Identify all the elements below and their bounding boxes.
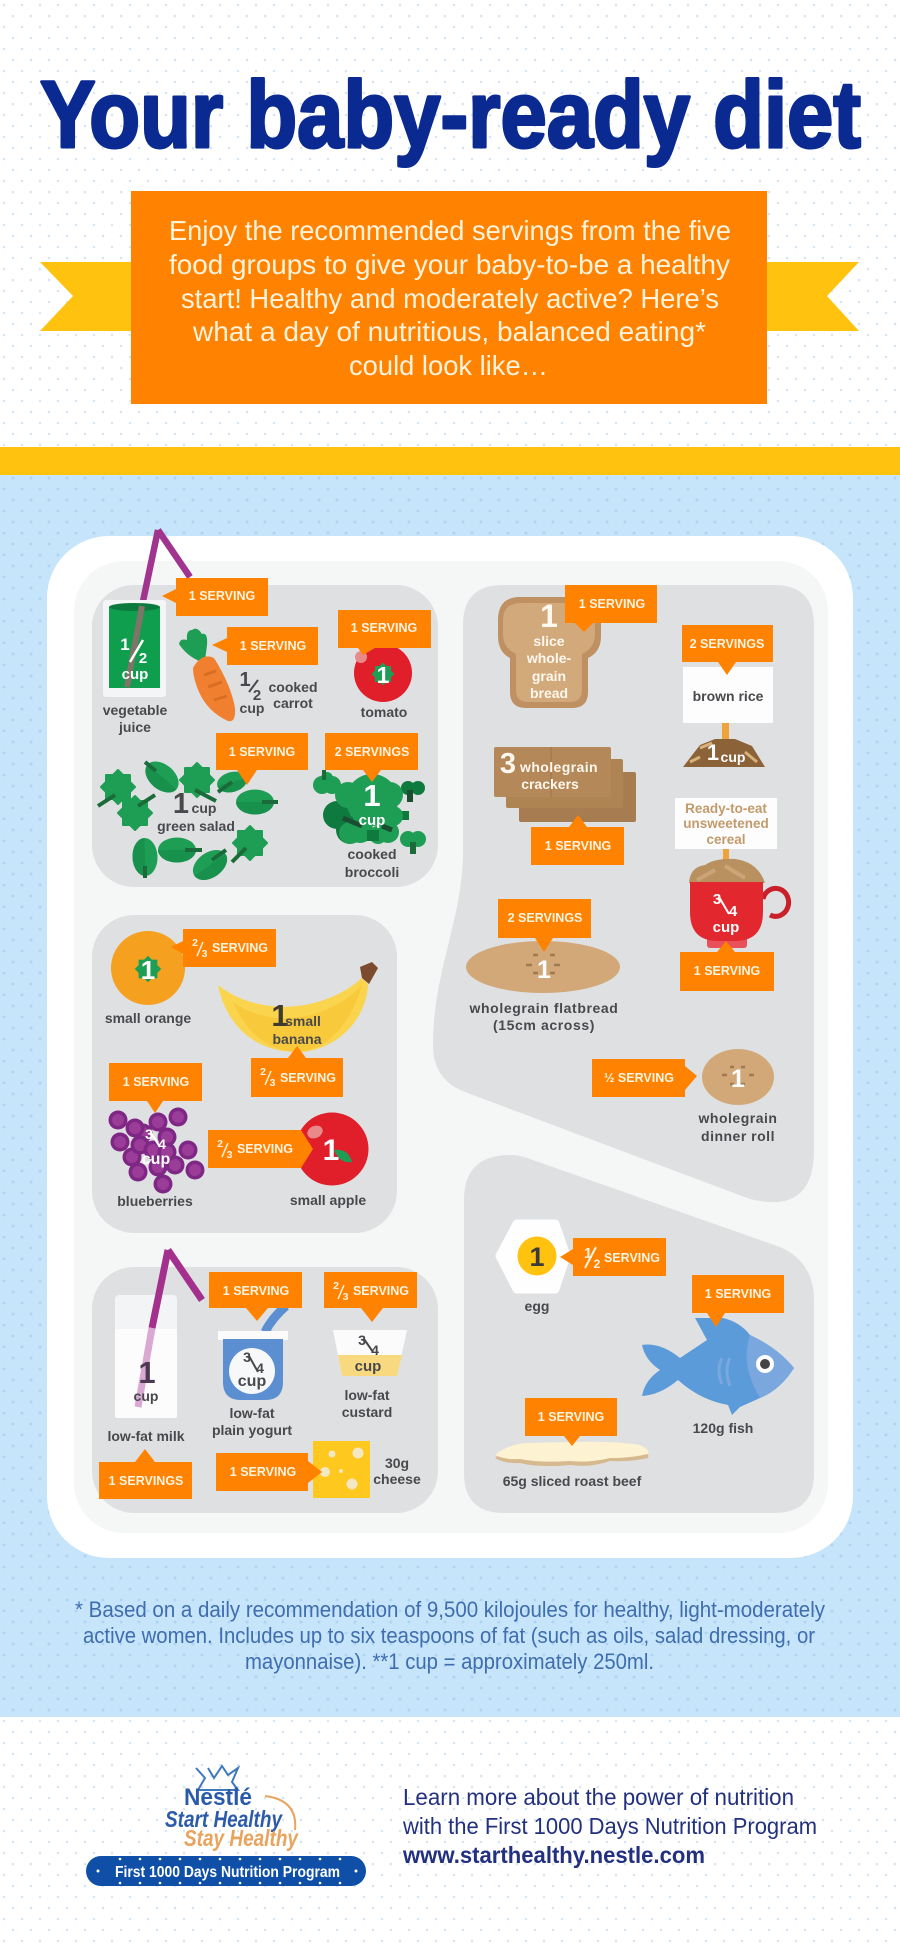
tomato: tomato — [361, 704, 407, 720]
tag: cereal serving — [680, 941, 774, 991]
120g fish: 120g fish — [693, 1420, 753, 1436]
brown rice — [683, 667, 773, 767]
logo: Nestlé Start Healthy Stay Healthy — [86, 1766, 366, 1886]
tag: cereal serving: 1 SERVING — [694, 964, 760, 978]
footer call to action: Learn more about the power of nutrition — [403, 1784, 794, 1810]
low-fat custard: cup — [355, 1358, 381, 1375]
tag: blueberries serving — [109, 1063, 202, 1113]
low-fat plain yogurt: 3 — [243, 1349, 251, 1365]
ready-to-eat cereal: 4 — [729, 903, 738, 920]
tag: blueberries serving: 1 SERVING — [123, 1075, 189, 1089]
banana — [218, 962, 378, 1052]
tag: yogurt serving — [209, 1272, 302, 1321]
tag: flatbread serving — [498, 899, 591, 952]
tag: carrot serving: 1 SERVING — [240, 639, 306, 653]
egg — [500, 1224, 566, 1314]
tag: salad serving: 1 SERVING — [229, 745, 295, 759]
vegetable juice: 1 — [120, 635, 130, 654]
panel: blue section background — [0, 475, 900, 1717]
tag: custard serving: SERVING — [353, 1284, 409, 1298]
blueberries: 3 — [145, 1126, 153, 1142]
wholegrain dinner roll: 1 — [731, 1065, 745, 1093]
brown rice: cup — [721, 749, 745, 765]
cooked carrot: 2 — [253, 687, 261, 704]
footer call to action: with the First 1000 Days Nutrition Program — [402, 1813, 817, 1839]
logo: Nestlé Start Healthy Stay Healthy: Start Healthy — [165, 1806, 283, 1832]
tag: cheese serving: 1 SERVING — [230, 1465, 296, 1479]
green salad: 1 — [173, 788, 189, 820]
footnote — [75, 1597, 826, 1674]
wholegrain crackers: wholegrain — [519, 759, 598, 775]
cooked broccoli: 1 — [363, 778, 381, 813]
brown rice: 1 — [707, 740, 719, 765]
ready-to-eat cereal: cup — [713, 919, 739, 936]
arc — [265, 1796, 295, 1830]
wholegrain dinner roll: dinner roll — [701, 1128, 775, 1144]
vegetable juice: vegetable — [103, 702, 168, 718]
tag: egg serving: 2 — [594, 1257, 601, 1271]
brown rice: brown rice — [693, 688, 764, 704]
wholegrain crackers — [494, 747, 636, 822]
low-fat plain yogurt: plain yogurt — [212, 1422, 292, 1438]
30g cheese: cheese — [373, 1471, 421, 1487]
low-fat custard: custard — [342, 1404, 392, 1420]
banana: 1 — [271, 998, 289, 1033]
wholegrain bread: 1 — [540, 598, 558, 634]
tag: banana serving: 2 — [260, 1066, 266, 1078]
cooked broccoli: broccoli — [345, 864, 399, 880]
tag: juice serving — [162, 578, 268, 616]
vegetable juice — [103, 530, 190, 735]
low-fat plain yogurt: low-fat — [229, 1405, 275, 1421]
tag: fish serving: 1 SERVING — [705, 1287, 771, 1301]
tag: banana serving: SERVING — [280, 1071, 336, 1085]
panel: grains compartment — [433, 585, 814, 1202]
small orange: small orange — [105, 1010, 191, 1026]
tag: beef serving — [525, 1398, 617, 1446]
green salad: cup — [192, 800, 216, 816]
small apple — [290, 1112, 368, 1208]
low-fat custard: 3 — [358, 1332, 366, 1348]
low-fat custard: low-fat — [344, 1387, 390, 1403]
tag: custard serving — [324, 1272, 417, 1322]
ribbon left tail — [40, 262, 135, 331]
small orange: 1 — [141, 955, 155, 985]
cooked broccoli: cup — [359, 812, 385, 829]
tag: banana serving: 3 — [270, 1077, 276, 1089]
ready-to-eat cereal — [675, 798, 789, 948]
egg: 1 — [529, 1242, 545, 1272]
orange intro box — [131, 191, 767, 404]
small orange — [105, 931, 191, 1026]
tag: crackers serving: 1 SERVING — [545, 839, 611, 853]
wholegrain crackers: 3 — [500, 748, 516, 780]
tag: tomato serving — [338, 610, 431, 655]
cooked carrot: carrot — [273, 695, 313, 711]
tag: broccoli serving: 2 SERVINGS — [335, 745, 409, 759]
ready-to-eat cereal: 3 — [713, 891, 721, 908]
green salad — [98, 755, 278, 886]
low-fat plain yogurt: 4 — [256, 1360, 264, 1376]
blueberries: cup — [142, 1151, 170, 1168]
120g fish — [642, 1318, 794, 1436]
wholegrain bread: slice — [533, 633, 565, 649]
low-fat milk: 1 — [138, 1355, 156, 1390]
low-fat plain yogurt: cup — [238, 1373, 266, 1390]
tag: bread serving: 1 SERVING — [579, 597, 645, 611]
low-fat custard: 4 — [371, 1342, 379, 1358]
cooked broccoli — [313, 770, 426, 880]
tag: egg serving — [560, 1238, 666, 1276]
tag: egg serving: 1 — [584, 1245, 592, 1262]
wholegrain crackers: crackers — [521, 776, 579, 792]
intro text: could look like… — [349, 350, 548, 381]
intro text: what a day of nutritious, balanced eating* — [192, 316, 706, 347]
cooked carrot: cup — [240, 700, 264, 716]
wholegrain bread: bread — [530, 685, 568, 701]
intro text — [169, 215, 731, 381]
footnote: * Based on a daily recommendation of 9,500 kilojoules for healthy, light-moderately — [75, 1597, 826, 1622]
tomato — [354, 644, 412, 720]
logo: Nestlé Start Healthy Stay Healthy: Stay Healthy — [184, 1825, 299, 1851]
tag: carrot serving — [212, 627, 318, 665]
yellow divider band — [0, 447, 900, 475]
tag: roll serving — [592, 1059, 697, 1097]
cooked carrot — [179, 629, 318, 721]
wholegrain flatbread: (15cm across) — [493, 1017, 595, 1033]
wholegrain bread — [498, 597, 601, 708]
footer call to action — [402, 1784, 817, 1868]
low-fat milk: cup — [134, 1388, 158, 1404]
cooked carrot: 1 — [239, 669, 251, 691]
small apple: small apple — [290, 1192, 366, 1208]
65g sliced roast beef — [495, 1442, 648, 1489]
panel: protein compartment — [464, 1155, 814, 1513]
panel: lunch tray — [47, 536, 853, 1558]
low-fat custard — [333, 1330, 407, 1420]
intro text: food groups to give your baby-to-be a healthy — [169, 249, 730, 280]
tag: cheese serving — [216, 1453, 322, 1491]
ready-to-eat cereal: unsweetened — [683, 816, 769, 831]
tag: banana serving — [251, 1046, 343, 1097]
wholegrain flatbread: 1 — [537, 956, 551, 984]
wholegrain dinner roll: wholegrain — [698, 1110, 777, 1126]
panel: dairy compartment — [92, 1267, 438, 1513]
tag: apple serving: 2 — [217, 1138, 223, 1150]
tag: egg serving: SERVING — [604, 1251, 660, 1265]
logo: Nestlé Start Healthy Stay Healthy: First 1000 Days Nutrition Program — [115, 1864, 340, 1881]
cooked carrot: cooked — [268, 679, 318, 695]
tag: juice serving: 1 SERVING — [189, 589, 255, 603]
tag: crackers serving — [531, 815, 624, 865]
tag: orange serving — [171, 929, 276, 967]
green salad: green salad — [157, 818, 235, 834]
tag: beef serving: 1 SERVING — [538, 1410, 604, 1424]
blueberries: blueberries — [117, 1193, 193, 1209]
egg: egg — [525, 1298, 549, 1314]
wholegrain dinner roll — [698, 1049, 777, 1144]
blueberries: 4 — [158, 1136, 166, 1152]
tag: roll serving: ½ SERVING — [604, 1071, 674, 1085]
wholegrain flatbread — [466, 941, 620, 1033]
vegetable juice: cup — [122, 666, 148, 683]
tomato: 1 — [377, 662, 390, 688]
ready-to-eat cereal: cereal — [706, 832, 746, 847]
tag: orange serving: 3 — [202, 948, 208, 960]
icon: nest with birds — [196, 1766, 238, 1790]
tag: yogurt serving: 1 SERVING — [223, 1284, 289, 1298]
30g cheese — [313, 1441, 421, 1498]
wholegrain bread: whole- — [526, 650, 571, 666]
ribbon right tail — [765, 262, 859, 331]
tag: tomato serving: 1 SERVING — [351, 621, 417, 635]
tag: rice serving: 2 SERVINGS — [690, 637, 764, 651]
tag: broccoli serving — [325, 733, 418, 782]
low-fat milk: low-fat milk — [107, 1428, 185, 1444]
tag: milk serving — [99, 1449, 192, 1499]
banana: small — [285, 1013, 321, 1029]
vegetable juice: juice — [118, 719, 151, 735]
tag: custard serving: 2 — [333, 1280, 339, 1292]
tag: milk serving: 1 SERVINGS — [109, 1474, 183, 1488]
wholegrain bread: grain — [532, 668, 566, 684]
ready-to-eat cereal: Ready-to-eat — [685, 801, 767, 816]
banana: banana — [272, 1031, 322, 1047]
cooked broccoli: cooked — [347, 846, 397, 862]
panel: fruit compartment — [92, 915, 397, 1233]
tag: apple serving: 3 — [227, 1149, 233, 1161]
vegetable juice: 2 — [139, 650, 147, 667]
tag: rice serving — [682, 625, 773, 675]
tag: bread serving — [565, 585, 657, 632]
tag: orange serving: 2 — [192, 937, 198, 949]
low-fat plain yogurt — [212, 1306, 292, 1438]
tag: orange serving: SERVING — [212, 941, 268, 955]
footnote: active women. Includes up to six teaspoons of fat (such as oils, salad dressing, or — [83, 1623, 815, 1648]
tag: fish serving — [692, 1275, 784, 1327]
blueberries — [108, 1108, 204, 1209]
tag: custard serving: 3 — [343, 1291, 349, 1303]
banner: ribbon and intro text — [40, 191, 859, 404]
small apple: 1 — [323, 1134, 339, 1167]
footer call to action: www.starthealthy.nestle.com — [402, 1842, 705, 1868]
footnote: mayonnaise). **1 cup = approximately 250ml. — [245, 1649, 654, 1674]
panel: vegetables compartment — [92, 585, 438, 887]
wholegrain flatbread: wholegrain flatbread — [469, 1000, 618, 1016]
tag: apple serving — [208, 1130, 313, 1168]
logo: Nestlé Start Healthy Stay Healthy: Nestlé — [184, 1784, 252, 1811]
tag: salad serving — [216, 733, 308, 785]
low-fat milk — [107, 1250, 202, 1444]
tag: flatbread serving: 2 SERVINGS — [508, 911, 582, 925]
65g sliced roast beef: 65g sliced roast beef — [503, 1473, 642, 1489]
tag: apple serving: SERVING — [237, 1142, 293, 1156]
program pill — [86, 1856, 366, 1886]
30g cheese: 30g — [385, 1455, 409, 1471]
intro text: Enjoy the recommended servings from the five — [169, 215, 731, 246]
intro text: start! Healthy and moderately active? Here’s — [181, 283, 719, 314]
